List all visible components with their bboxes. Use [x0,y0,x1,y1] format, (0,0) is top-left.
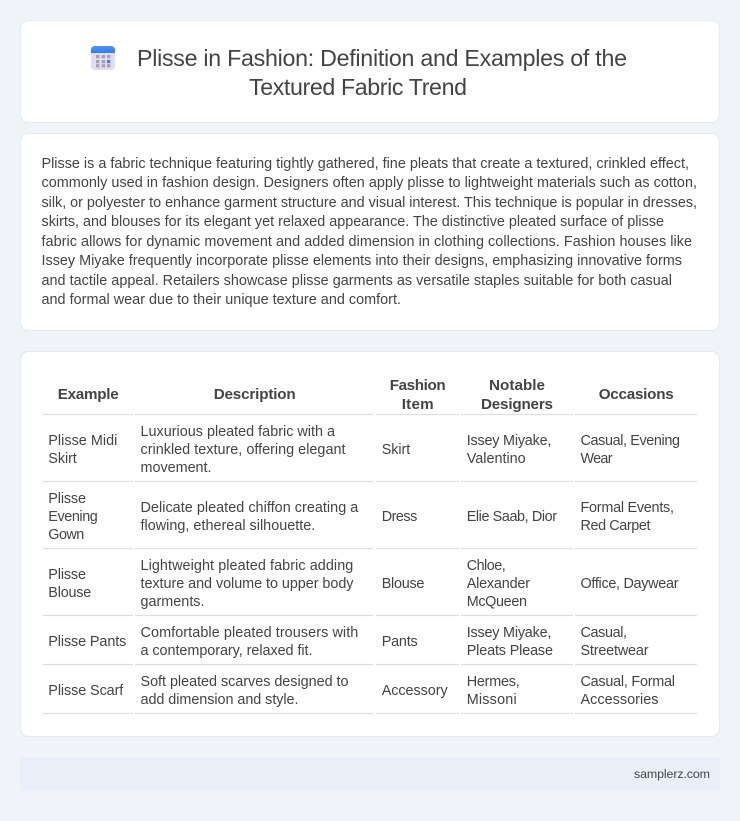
row: Plisse Evening Gown: Red Carpet [580,518,650,534]
row: Plisse Pants: Pants [382,634,418,650]
row: Plisse Midi Skirt: Skirt [382,442,410,458]
row: Plisse Evening Gown: Formal Events, [580,500,674,516]
paragraph text: skirts, and blouses for its elegant yet relaxed appearance. The distinctive pleated surface of plisse [42,214,664,230]
row: Plisse Evening Gown: Delicate pleated chiffon creating a [140,500,358,516]
paragraph text [42,156,697,308]
row: Plisse Evening Gown: Dress [382,509,417,525]
row: Plisse Pants: Pleats Please [467,643,553,659]
title: Plisse in Fashion: Definition and Examples of the [137,45,627,71]
row: Plisse Scarf: Soft pleated scarves designed to [140,674,348,690]
table header row: Item [402,396,434,413]
row: Plisse Midi Skirt [43,424,697,482]
row: Plisse Pants: Issey Miyake, [467,625,551,641]
row: Plisse Blouse: texture and volume to upper body [140,576,354,592]
title: Textured Fabric Trend [249,74,467,100]
row: Plisse Scarf: Casual, Formal [580,674,675,690]
row: Plisse Pants: Streetwear [580,643,649,659]
row: Plisse Blouse: Blouse [382,576,424,592]
panel: examples table [20,352,720,736]
footer bar [20,757,720,791]
paragraph text: silk, or polyester to enhance garment structure and visual interest. This technique is popular in dresses, [42,195,697,211]
table header row: Designers [481,396,553,413]
row: Plisse Evening Gown: Gown [48,527,84,543]
row: Plisse Evening Gown: Plisse [48,491,86,507]
title [137,45,627,100]
row: Plisse Scarf [43,674,697,714]
row: Plisse Midi Skirt: Issey Miyake, [467,433,551,449]
row: Plisse Midi Skirt: Casual, Evening [580,433,680,449]
row: Plisse Blouse: Alexander [467,576,530,592]
table header row: Example [58,386,119,403]
row: Plisse Pants: Plisse Pants [48,634,126,650]
row: Plisse Scarf: Missoni [467,692,517,708]
row: Plisse Blouse: Plisse [48,567,86,583]
footer source text: samplerz.com [634,767,710,781]
paragraph text: commonly used in fashion design. Designers often apply plisse to lightweight materials such as cotton, [42,175,697,191]
row: Plisse Midi Skirt: Skirt [48,451,77,467]
row: Plisse Scarf: add dimension and style. [140,692,298,708]
row: Plisse Evening Gown: Evening [48,509,98,525]
row: Plisse Evening Gown: flowing, ethereal silhouette. [140,518,315,534]
row: Plisse Blouse: McQueen [467,594,527,610]
row: Plisse Blouse [43,558,697,616]
row: Plisse Midi Skirt: Plisse Midi [48,433,117,449]
table header row [43,377,697,414]
row: Plisse Pants: a contemporary, relaxed fit. [140,643,312,659]
row: Plisse Scarf: Hermes, [467,674,520,690]
header panel [20,20,720,122]
paragraph text: Issey Miyake frequently incorporate plisse elements into their designs, emphasizing innovative forms [42,253,682,269]
table header row: Notable [489,377,545,394]
paragraph text: and formal wear due to their unique texture and comfort. [42,292,401,308]
row: Plisse Blouse: Office, Daywear [580,576,679,592]
row: Plisse Blouse: Blouse [48,585,91,601]
paragraph text: and tactile appeal. Retailers showcase plisse garments as versatile staples suitable for both casual [42,273,672,289]
table header row: Occasions [599,386,674,403]
panel: definition paragraph [20,134,720,330]
row: Plisse Evening Gown [43,491,697,548]
icon: calendar [91,46,115,70]
row: Plisse Scarf: Accessories [580,692,658,708]
row: Plisse Scarf: Accessory [382,683,448,699]
row: Plisse Midi Skirt: Luxurious pleated fabric with a [140,424,335,440]
row: Plisse Evening Gown: Elie Saab, Dior [467,509,557,525]
table header row: Fashion [390,377,446,394]
row: Plisse Pants: Comfortable pleated trousers with [140,625,358,641]
table header row: Description [214,386,296,403]
row: Plisse Pants: Casual, [580,625,627,641]
row: Plisse Midi Skirt: movement. [140,460,212,476]
paragraph text: fabric allows for dynamic movement and added dimension in clothing collections. Fashion houses like [42,234,692,250]
row: Plisse Scarf: Plisse Scarf [48,683,124,699]
row: Plisse Pants [43,625,697,664]
row: Plisse Blouse: Chloe, [467,558,506,574]
row: Plisse Midi Skirt: crinkled texture, offering elegant [140,442,346,458]
row: Plisse Midi Skirt: Valentino [467,451,526,467]
paragraph text: Plisse is a fabric technique featuring tightly gathered, fine pleats that create a textured, crinkled effect, [42,156,689,172]
row: Plisse Midi Skirt: Wear [580,451,613,467]
row: Plisse Blouse: Lightweight pleated fabric adding [140,558,353,574]
row: Plisse Blouse: garments. [140,594,204,610]
